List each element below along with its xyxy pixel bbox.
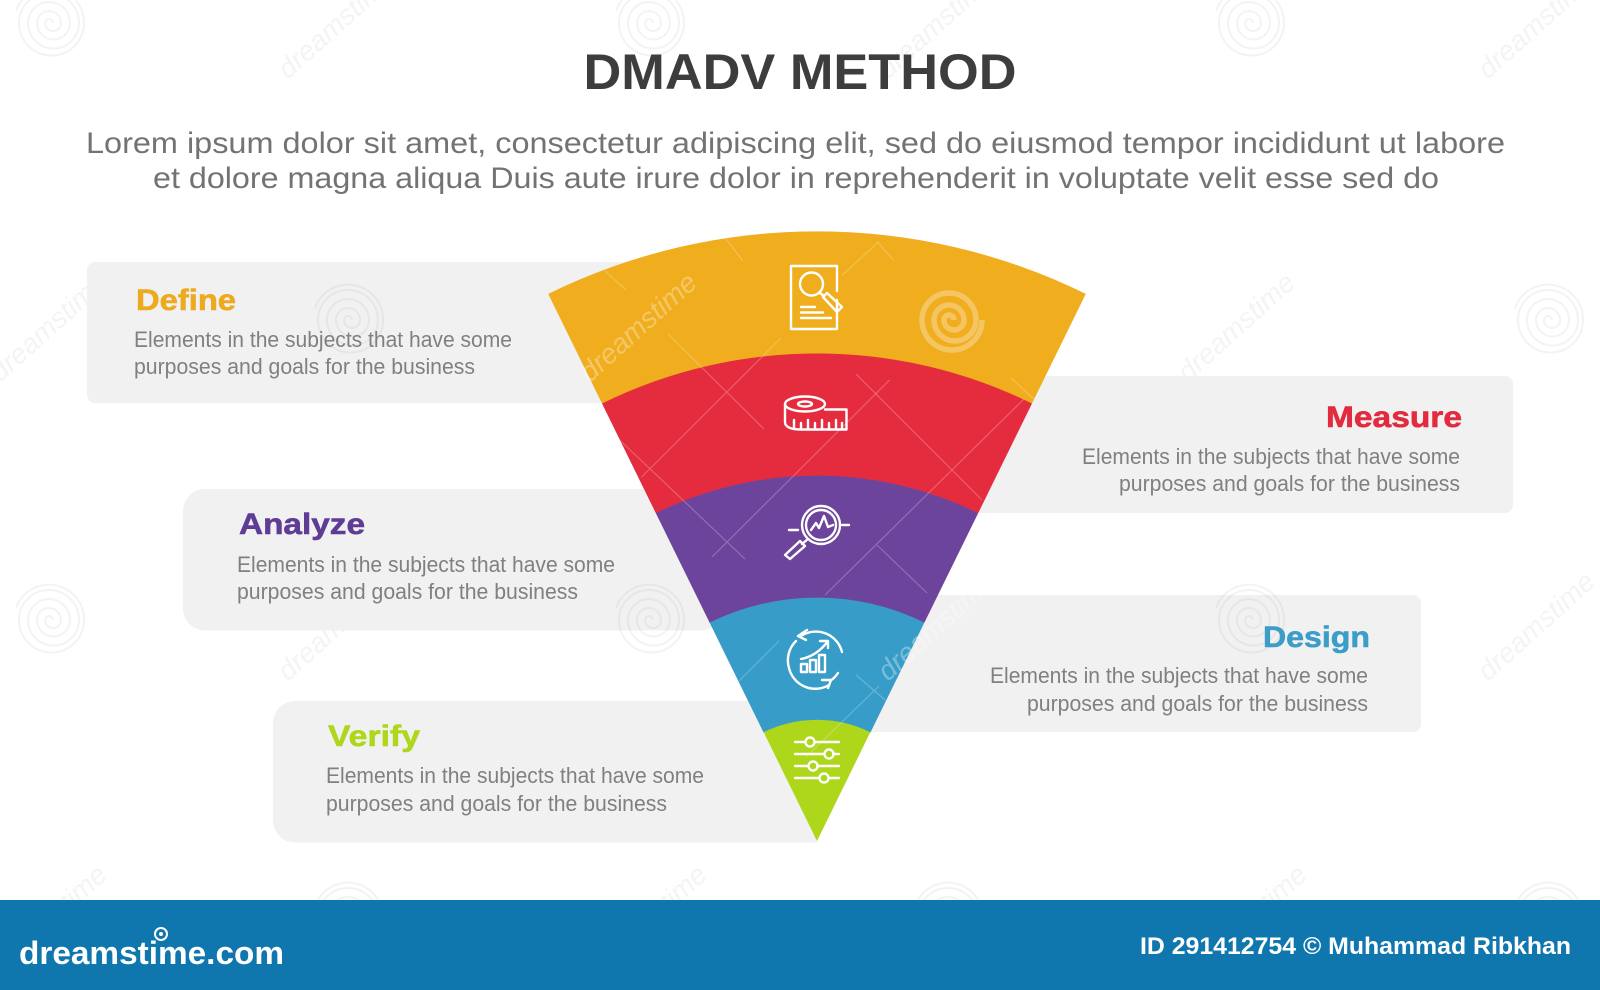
text: dreamstime — [1171, 267, 1301, 387]
description: Design: purposes and goals for the business — [1027, 691, 1368, 716]
description: Measure: purposes and goals for the business — [1119, 471, 1460, 496]
panel: Analyze — [183, 489, 723, 630]
footer bar — [0, 900, 1600, 990]
heading: Verify: Verify — [328, 720, 420, 753]
icon: document with magnifier — [791, 266, 842, 329]
text: dreamstime — [1471, 566, 1600, 686]
panel: Verify — [273, 701, 817, 842]
description: Define — [134, 327, 512, 379]
heading: Design: Design — [1263, 621, 1370, 654]
panel: Measure — [960, 376, 1513, 513]
description: Define: purposes and goals for the business — [134, 354, 475, 379]
subtitle text block: Lorem ipsum dolor sit amet, consectetur adipiscing elit, sed do eiusmod tempor incididunt ut labore — [86, 127, 1505, 160]
text: dreamstime — [1183, 859, 1313, 979]
subtitle text block: et dolore magna aliqua Duis aute irure dolor in reprehenderit in voluptate velit esse sed do — [153, 162, 1439, 195]
text: dreamstime — [871, 566, 1001, 686]
description: Analyze: purposes and goals for the business — [237, 579, 578, 604]
segment: Define orange — [548, 232, 1086, 404]
text: dreamstime — [583, 859, 713, 979]
heading: Measure: Measure — [1326, 401, 1462, 434]
footer logo: dreamstime.com — [19, 935, 284, 971]
funnel chart — [548, 232, 1086, 841]
description: Analyze — [237, 552, 615, 604]
icon: measuring tape — [785, 396, 846, 430]
icon: sliders — [795, 738, 839, 782]
description: Measure: Elements in the subjects that have some — [1082, 444, 1460, 469]
description: Verify: Elements in the subjects that have some — [326, 763, 704, 788]
description: Verify: purposes and goals for the business — [326, 791, 667, 816]
description: Define: Elements in the subjects that have some — [134, 327, 512, 352]
segment: Analyze purple — [656, 476, 978, 623]
panel: Define — [87, 262, 647, 403]
description: Measure — [1082, 444, 1460, 496]
segment: Measure red — [602, 354, 1032, 513]
icon: analysis magnifier — [785, 506, 849, 559]
footer credit: ID 291412754 © Muhammad Ribkhan — [1140, 933, 1571, 960]
description: Design — [990, 663, 1368, 716]
heading: Analyze: Analyze — [239, 508, 365, 541]
text: dreamstime — [573, 267, 703, 387]
heading: Define: Define — [136, 284, 236, 317]
text: dreamstime — [271, 566, 401, 686]
segment: Verify green — [764, 720, 870, 841]
icon: redesign cycle with chart — [788, 630, 842, 689]
segment: Design blue — [710, 598, 924, 732]
description: Design: Elements in the subjects that have some — [990, 663, 1368, 688]
description: Analyze: Elements in the subjects that have some — [237, 552, 615, 577]
description: Verify — [326, 763, 704, 816]
title: DMADV METHOD — [584, 44, 1016, 100]
subtitle text block — [86, 127, 1505, 195]
panel: Design — [850, 595, 1421, 732]
